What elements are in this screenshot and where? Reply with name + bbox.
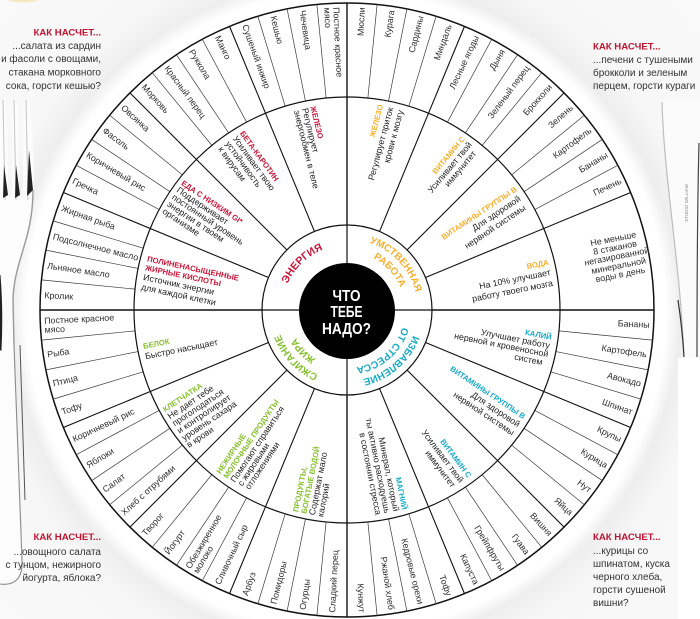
nutrient: B vitamins (stress): нервной системы <box>451 390 516 437</box>
nutrient: low-fat dairy: НЕЖИРНЫЕ <box>215 432 248 475</box>
foods: upper left quadrant <box>44 7 345 302</box>
foods: upper left quadrant: Овсянка <box>119 103 152 134</box>
lemon slice at top edge <box>9 0 37 2</box>
nutrient: beta carotene: БЕТА-КАРОТИН <box>238 129 281 183</box>
nutrient: iron (mental): ЖЕЛЕЗО <box>368 104 385 139</box>
foods: lower right quadrant: Тофу <box>437 574 454 597</box>
white page margin lower right <box>678 358 700 619</box>
foods: upper right quadrant: Бананы <box>577 150 609 175</box>
foods: lower left quadrant: Сладкий перец <box>327 550 340 613</box>
foods: lower left quadrant: Огурцы <box>298 578 312 610</box>
callout: top right <box>593 42 695 92</box>
nutrient: iron (energy): энергообмен в теле <box>292 109 321 190</box>
foods: lower right quadrant: Капуста <box>458 552 481 586</box>
central black circle: title: ЧТО <box>332 288 360 305</box>
foods: lower left quadrant: Птица <box>52 373 79 388</box>
nutrient: polyunsaturated fats: для каждой клетки <box>140 282 217 307</box>
nutrient: fiber: Не дает тебе <box>165 383 215 421</box>
category: mental work: УМСТВЕННАЯ <box>370 236 422 292</box>
nutrient: protein: Быстро насыщает <box>144 337 219 361</box>
nutrient: fiber: КЛЕТЧАТКА <box>161 381 204 414</box>
foods: lower left quadrant: Сливочный сыр <box>213 523 250 586</box>
nutrient: magnesium: МАГНИЙ <box>394 476 409 511</box>
category: mental work: РАБОТА <box>374 252 406 288</box>
category: fat burning: ЖИРА <box>292 338 316 364</box>
foods: lower left quadrant: Коричневый рис <box>71 406 137 444</box>
foods: lower left quadrant: Салат <box>101 471 127 495</box>
foods: lower right quadrant: Крупы <box>596 424 623 444</box>
nutrient: magnesium: Минерал, который <box>377 436 401 512</box>
nutrient: vitamin C (mental): Усиливает твой <box>426 140 474 195</box>
foods: upper left quadrant: Коричневый рис <box>85 150 148 193</box>
foods: lower right quadrant: Бананы <box>618 318 650 330</box>
callout: bottom right <box>593 532 670 609</box>
nutrient: magnesium: ты активно расходуешь <box>364 417 392 514</box>
nutrient: low-fat dairy: Помогают справиться <box>228 404 286 484</box>
foods: upper right quadrant: Курага <box>383 9 396 38</box>
callout: bottom left: ...овощного салата <box>13 547 101 558</box>
foods: upper right quadrant <box>355 7 623 198</box>
nutrient: low-fat dairy: с жировыми <box>236 441 271 488</box>
callout: bottom right: ...курицы со <box>593 546 649 557</box>
category: stress relief: ОТ СТРЕССА <box>356 328 408 374</box>
nutrient: vitamin C (stress): Усиливает твой <box>420 428 466 485</box>
nutrient: fiber: уровень сахара <box>180 399 238 443</box>
nutrient: potassium: Улучшает работу <box>480 327 552 351</box>
foods: lower left quadrant <box>44 312 340 613</box>
nutrient: magnesium: в состоянии стресса <box>357 432 383 516</box>
central black circle: title: ТЕБЕ <box>330 304 363 321</box>
callout: bottom right: черного хлеба, <box>593 571 662 583</box>
callout: top right: перцем, горсти кураги <box>593 81 695 92</box>
callout: bottom left: с тунцом, нежирного <box>6 560 101 571</box>
foods: upper left quadrant: Фасоль <box>101 125 132 152</box>
nutrient: watery foods: калорий <box>315 483 332 518</box>
foods: upper right quadrant: Лесные ягоды <box>447 34 481 91</box>
foods: lower left quadrant: Обезжиренное <box>183 513 224 570</box>
foods: lower left quadrant: мясо <box>44 324 65 335</box>
nutrient: polyunsaturated fats: Источник энергии <box>142 272 215 297</box>
foods: upper left quadrant: Руккола <box>187 48 213 81</box>
foods: lower right quadrant: Кунжут <box>355 583 367 613</box>
foods: upper right quadrant: Дыня <box>487 47 507 72</box>
nutrient: iron (mental): крови к мозгу <box>382 108 406 164</box>
callout: bottom right: КАК НАСЧЕТ... <box>593 532 661 543</box>
icon: knife <box>662 100 700 358</box>
callout: top left: ...салата из сардин <box>12 41 101 52</box>
foods: upper left quadrant: Гречка <box>71 176 100 197</box>
nutrient: polyunsaturated fats: ЖИРНЫЕ КИСЛОТЫ <box>143 263 222 288</box>
foods: lower left quadrant: молоко <box>191 544 215 575</box>
callout: top left: стакана морковного <box>9 68 101 78</box>
foods: upper left quadrant: Манго <box>213 34 233 61</box>
callout: bottom left: йогурта, яблока? <box>22 572 101 584</box>
foods: lower right quadrant: Картофель <box>601 343 648 359</box>
callout: bottom right: вишни? <box>593 598 629 609</box>
nutrient: polyunsaturated fats: ПОЛИНЕНАСЫЩЕННЫЕ <box>146 254 240 283</box>
nutrient: B vitamins (stress): Для здоровой <box>469 390 522 429</box>
nutrient: low GI food: ЕДА С НИЗКИМ GI* <box>180 179 244 226</box>
nutrient: watery foods: ПРОДУКТЫ, <box>291 466 309 513</box>
nutrient: beta carotene: к вирусам <box>216 145 248 183</box>
nutrient: vitamin C (stress): иммунитет <box>423 448 458 489</box>
foods: upper left quadrant: Подсолнечное масло <box>52 232 140 263</box>
foods: lower left quadrant: Творог <box>140 511 166 538</box>
callout: bottom left <box>6 532 101 584</box>
nutrient: B vitamins (mental): ВИТАМИНЫ ГРУППЫ В <box>440 185 519 241</box>
foods: upper left quadrant: Красный перец <box>162 64 208 120</box>
foods: upper right quadrant: Мюсли <box>355 7 367 36</box>
nutrient: low GI food: энергии в твоем <box>165 199 226 244</box>
foods: lower left quadrant: Яблоки <box>85 446 116 470</box>
nutrient: iron (mental): Регулирует приток <box>366 106 395 181</box>
foods: upper right quadrant: Печень <box>592 176 623 198</box>
foods: upper left quadrant: Сушеный инжир <box>240 23 272 90</box>
foods: upper right quadrant: Миндаль <box>432 23 454 61</box>
nutrient: vitamin C (stress): ВИТАМИН С <box>438 437 473 480</box>
water amount note: Не меньше <box>589 229 637 248</box>
nutrient: potassium: нервной и кровеносной <box>453 331 549 359</box>
foods: upper left quadrant: Постное красное <box>331 7 345 77</box>
foods: upper left quadrant: Морковь <box>140 82 171 116</box>
central black circle: title <box>299 263 395 359</box>
foods: lower right quadrant: Ржаной хлеб <box>379 556 396 610</box>
foods: lower right quadrant: Шпинат <box>601 397 634 417</box>
nutrient: fiber: и контролирует <box>175 392 233 435</box>
water amount note: воды в день <box>595 265 646 284</box>
nutrient: watery foods: Содержат мало <box>307 451 329 516</box>
foods: upper left quadrant: Кролик <box>44 290 74 302</box>
water amount note: 8 стаканов <box>592 238 638 257</box>
foods: lower right quadrant: Гуава <box>510 532 532 556</box>
foods: lower left quadrant: Рыба <box>47 346 70 359</box>
nutrient: water: На 10% улучшает <box>478 267 551 291</box>
callout: top right: брокколи и зеленым <box>593 67 687 79</box>
callout: top left: сока, горсти кешью? <box>6 81 101 92</box>
nutrient: B vitamins (stress): ВИТАМИНЫ ГРУППЫ В <box>448 364 527 421</box>
callout: bottom right: горсти сушеной <box>593 585 666 596</box>
nutrient: beta carotene: Усиливает твою <box>231 134 277 193</box>
callout: top left: КАК НАСЧЕТ... <box>33 28 101 38</box>
nutrient: low GI food: Поддерживает <box>175 185 230 227</box>
nutrient: protein: БЕЛОК <box>142 337 171 351</box>
foods: upper right quadrant: Зелень <box>546 103 575 130</box>
central black circle: title: НАДО? <box>322 321 371 338</box>
callout: top left <box>1 28 101 92</box>
foods: upper left quadrant: Жирная рыба <box>60 203 116 232</box>
foods: lower right quadrant: Грейпфруты <box>472 524 507 572</box>
nutrient: watery foods: БОГАТЫЕ ВОДОЙ <box>300 445 322 514</box>
foods: lower right quadrant: Яйца <box>552 495 575 517</box>
nutrient: fiber: в крови <box>185 424 215 450</box>
foods: lower left quadrant: Йогурт <box>162 528 187 556</box>
foods: upper left quadrant: Чечевица <box>298 10 313 50</box>
nutrient: beta carotene: устойчивость <box>223 139 264 189</box>
category: energy: ЭНЕРГИЯ <box>282 243 322 283</box>
foods: lower right quadrant: Вишня <box>528 511 554 538</box>
foods: lower left quadrant: Тофу <box>60 400 84 417</box>
foods: lower left quadrant: Хлеб с отрубями <box>119 463 177 517</box>
callout: bottom left: КАК НАСЧЕТ... <box>33 532 101 543</box>
foods: lower right quadrant: Авокадо <box>606 370 642 388</box>
foods: upper right quadrant: Картофель <box>551 125 594 161</box>
water amount note: минеральной <box>590 255 647 276</box>
foods: lower right quadrant: Кедровые орехи <box>399 537 425 605</box>
nutrient: iron (energy): Регулирует <box>300 107 321 154</box>
nutrient: water: работу твоего мозга <box>471 278 554 304</box>
nutrient: low-fat dairy: отложениями <box>243 440 282 491</box>
foods: lower left quadrant: Помидоры <box>269 560 289 605</box>
foods: upper right quadrant: Брокколи <box>521 82 554 117</box>
nutrient: potassium: систем <box>514 352 544 367</box>
foods: upper left quadrant: Кешью <box>269 15 285 45</box>
nutrient: low GI food: организме <box>161 206 202 238</box>
foods: upper left quadrant: Льняное масло <box>47 261 110 280</box>
icon: fork <box>0 100 34 584</box>
nutrient: water: ВОДА <box>526 258 550 271</box>
foods: lower left quadrant: Постное красное <box>44 312 114 326</box>
nutrient: low GI food: постоянный уровень <box>170 192 246 247</box>
callout: top right: ...печени с тушеными <box>593 55 693 66</box>
nutrient: vitamin C (mental): иммунитет <box>442 149 478 189</box>
callout: top right: КАК НАСЧЕТ... <box>593 42 661 52</box>
nutrient: potassium: КАЛИЙ <box>524 328 553 342</box>
icon: knife: STUDIO WILLIAM <box>684 184 689 222</box>
callout: top left: и фасоли с овощами, <box>1 53 101 65</box>
water amount note: негазированной <box>583 245 650 268</box>
foods: lower left quadrant: Арбуз <box>240 571 258 597</box>
foods: lower right quadrant: Курица <box>579 446 610 470</box>
foods: lower right quadrant: Нут <box>575 478 593 495</box>
foods: lower right quadrant <box>355 318 650 613</box>
foods: upper right quadrant: Сардины <box>407 15 425 54</box>
nutrient: low-fat dairy: МОЛОЧНЫЕ ПРОДУКТЫ <box>222 397 281 480</box>
nutrient: B vitamins (mental): Для здоровой <box>470 193 523 233</box>
nutrient: fiber: проголодаться <box>170 387 226 428</box>
category: stress relief: ИЗБАВЛЕНИЕ <box>363 336 420 386</box>
nutrient: vitamin C (mental): ВИТАМИН С <box>431 134 467 176</box>
callout: bottom right: шпинатом, куска <box>593 559 670 570</box>
foods: upper right quadrant: Зеленый перец <box>486 64 532 121</box>
foods: upper left quadrant: мясо <box>322 7 333 28</box>
category: fat burning: СЖИГАНИЕ <box>274 334 317 380</box>
nutrient: iron (energy): ЖЕЛЕЗО <box>308 104 325 140</box>
nutrient: B vitamins (mental): нервной системы <box>463 203 527 251</box>
